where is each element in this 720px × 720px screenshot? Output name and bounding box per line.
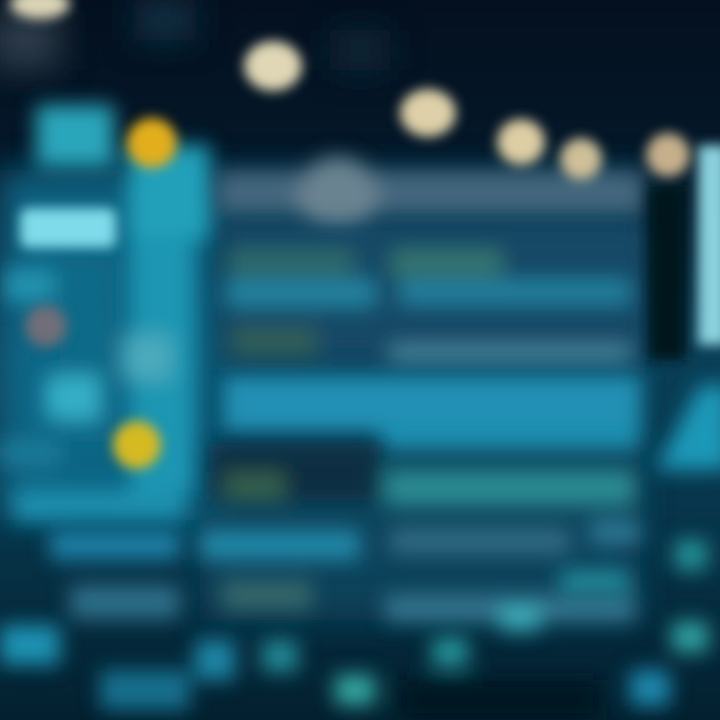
- right pale bar: [698, 145, 720, 345]
- icon: light 2: [400, 89, 456, 137]
- panel: left teal column: [0, 105, 210, 520]
- scattered bottom tiles: [0, 540, 708, 720]
- icon: top left light: [10, 0, 70, 19]
- icon: light 1: [244, 41, 302, 91]
- table header row: [218, 157, 643, 233]
- right teal shape: [655, 385, 720, 470]
- icon: yellow dot bottom: [113, 421, 161, 469]
- icon: light 4: [560, 138, 602, 180]
- icon: light 3: [497, 119, 545, 165]
- dark vertical gap: [648, 185, 686, 360]
- table highlight band: [222, 375, 642, 450]
- table body rows: [225, 225, 645, 363]
- icon: light 5: [646, 133, 690, 177]
- icon: muted red dot: [25, 305, 67, 347]
- icon: yellow dot top: [127, 118, 177, 168]
- left column glow: [0, 0, 645, 620]
- panel: lower rows: [50, 445, 640, 631]
- callout: pale cyan bar: [20, 208, 116, 248]
- panel: central table: [218, 157, 645, 450]
